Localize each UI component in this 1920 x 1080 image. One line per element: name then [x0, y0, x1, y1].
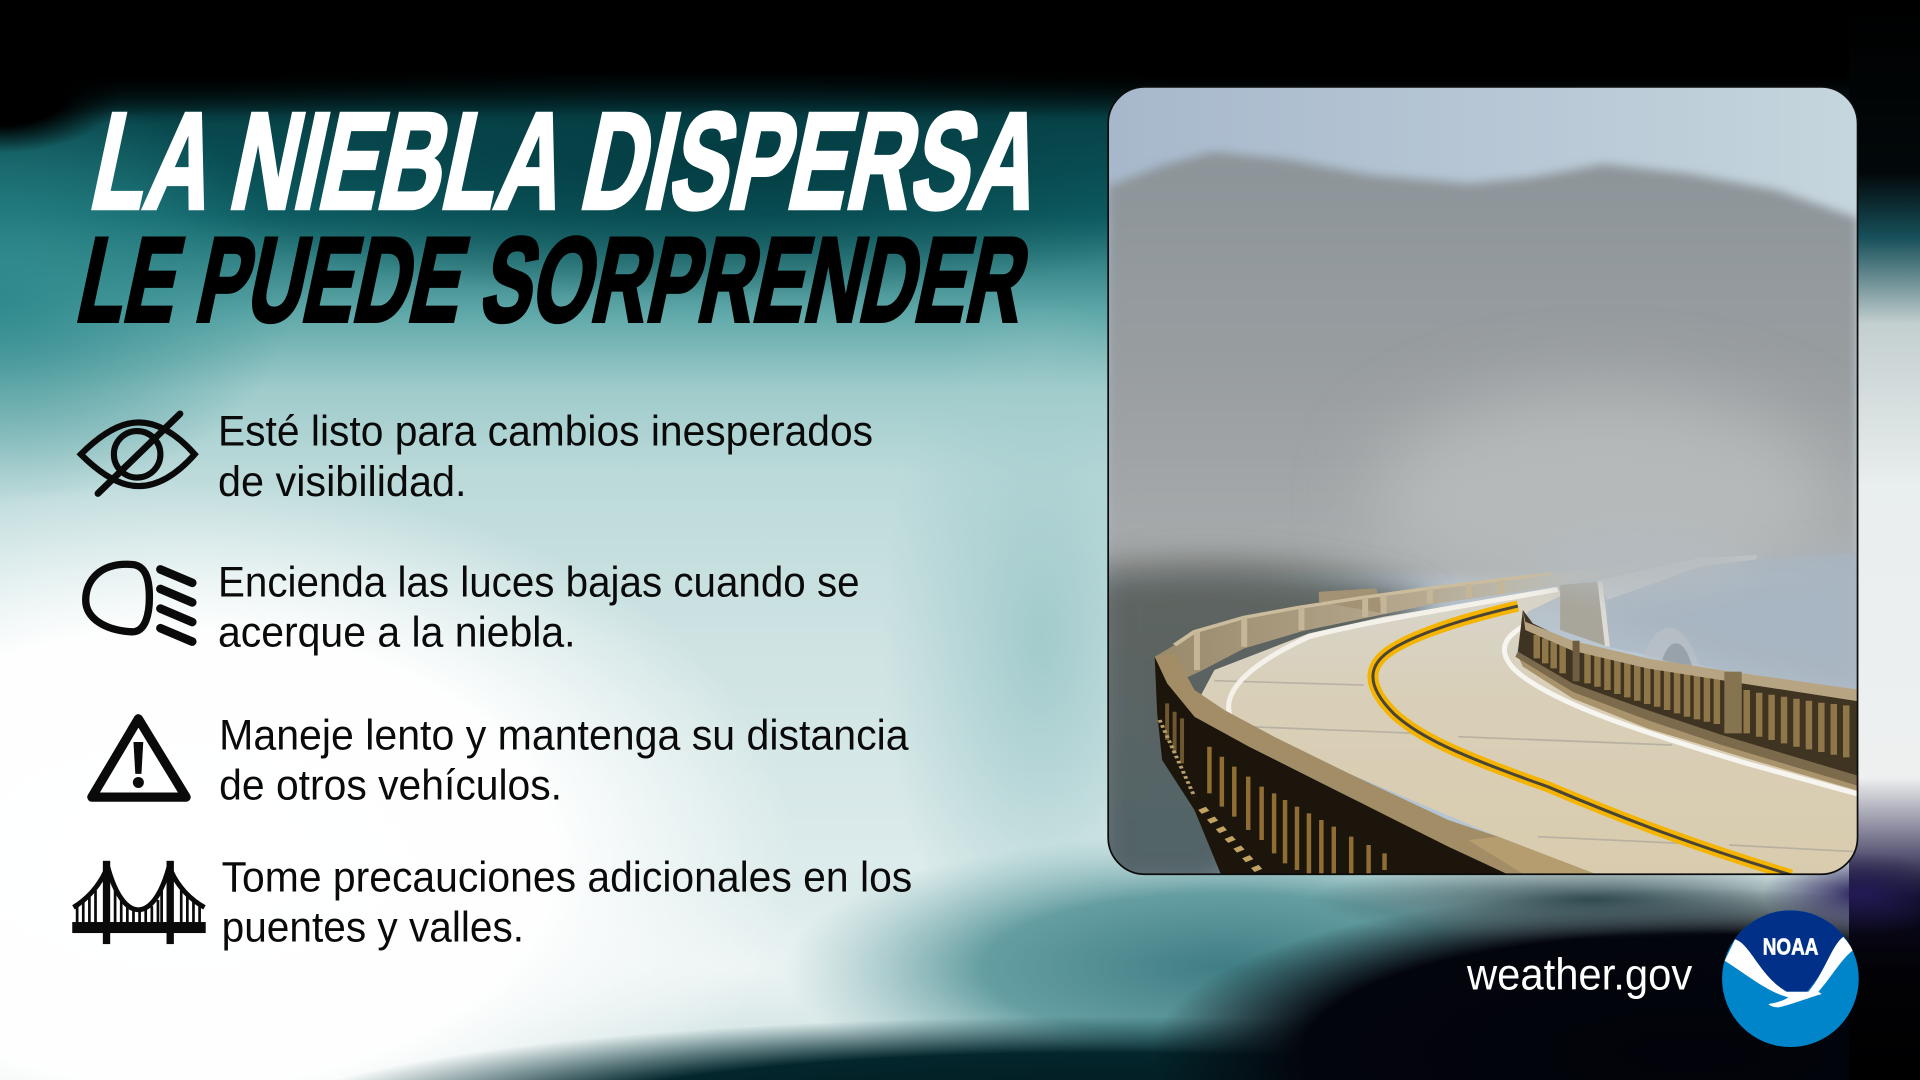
mountain silhouette: [1108, 152, 1858, 576]
text: Encienda las luces bajas cuando se: [218, 558, 860, 606]
title line 2: LE PUEDE SORPRENDER: [68, 212, 1041, 347]
near parapet capstone: [1155, 653, 1602, 877]
tip 3: drive slowly: [92, 711, 909, 810]
NOAA logo: NOAA: [1763, 934, 1818, 960]
text: de otros vehículos.: [219, 762, 562, 810]
icon: suspension bridge: [72, 861, 206, 944]
title: [68, 85, 1056, 347]
text: Tome precauciones adicionales en los: [222, 853, 912, 901]
tip 1: visibility: [81, 408, 873, 506]
road surface: [1194, 588, 1861, 877]
text: [219, 711, 909, 810]
pale water far right: [1684, 552, 1856, 690]
brown sliver beside right lane edge: [1517, 653, 1861, 792]
far parapet of road: [1154, 576, 1554, 677]
icon: headlight: [86, 564, 192, 642]
near balustrade, dark: [1155, 657, 1513, 877]
yellow center line: [1373, 606, 1791, 875]
far arches: [1608, 632, 1726, 670]
photo: foggy curving bridge road: [1090, 87, 1873, 894]
left lane edge line: [1229, 589, 1558, 717]
dark hillside, lower left: [1090, 563, 1433, 894]
photo frame: [1108, 87, 1858, 874]
NOAA logo: [1722, 910, 1859, 1047]
fog over far bridge: [1538, 557, 1728, 601]
title line 1: LA NIEBLA DISPERSA: [81, 85, 1056, 238]
text: [218, 558, 860, 657]
icon: crossed-out eye: [81, 414, 195, 493]
text: acerque a la niebla.: [218, 609, 576, 657]
right parapet: [1518, 610, 1861, 783]
text: [222, 853, 912, 952]
tip 4: bridges and valleys: [72, 853, 912, 952]
text: [218, 408, 873, 506]
text: de visibilidad.: [218, 458, 467, 506]
tip 2: low beams: [86, 558, 860, 657]
text: puentes y valles.: [222, 904, 524, 952]
far railing of right side: [1597, 555, 1757, 600]
pavement seams: [1214, 681, 1856, 852]
text: Esté listo para cambios inesperados: [218, 408, 873, 456]
website label: weather.gov: [1466, 950, 1692, 999]
icon: warning triangle: [92, 719, 186, 797]
bridge pillar: [1560, 582, 1608, 647]
right lane edge line: [1504, 627, 1861, 795]
text: Maneje lento y mantenga su distancia: [219, 711, 909, 759]
fog sky: [1108, 87, 1858, 874]
